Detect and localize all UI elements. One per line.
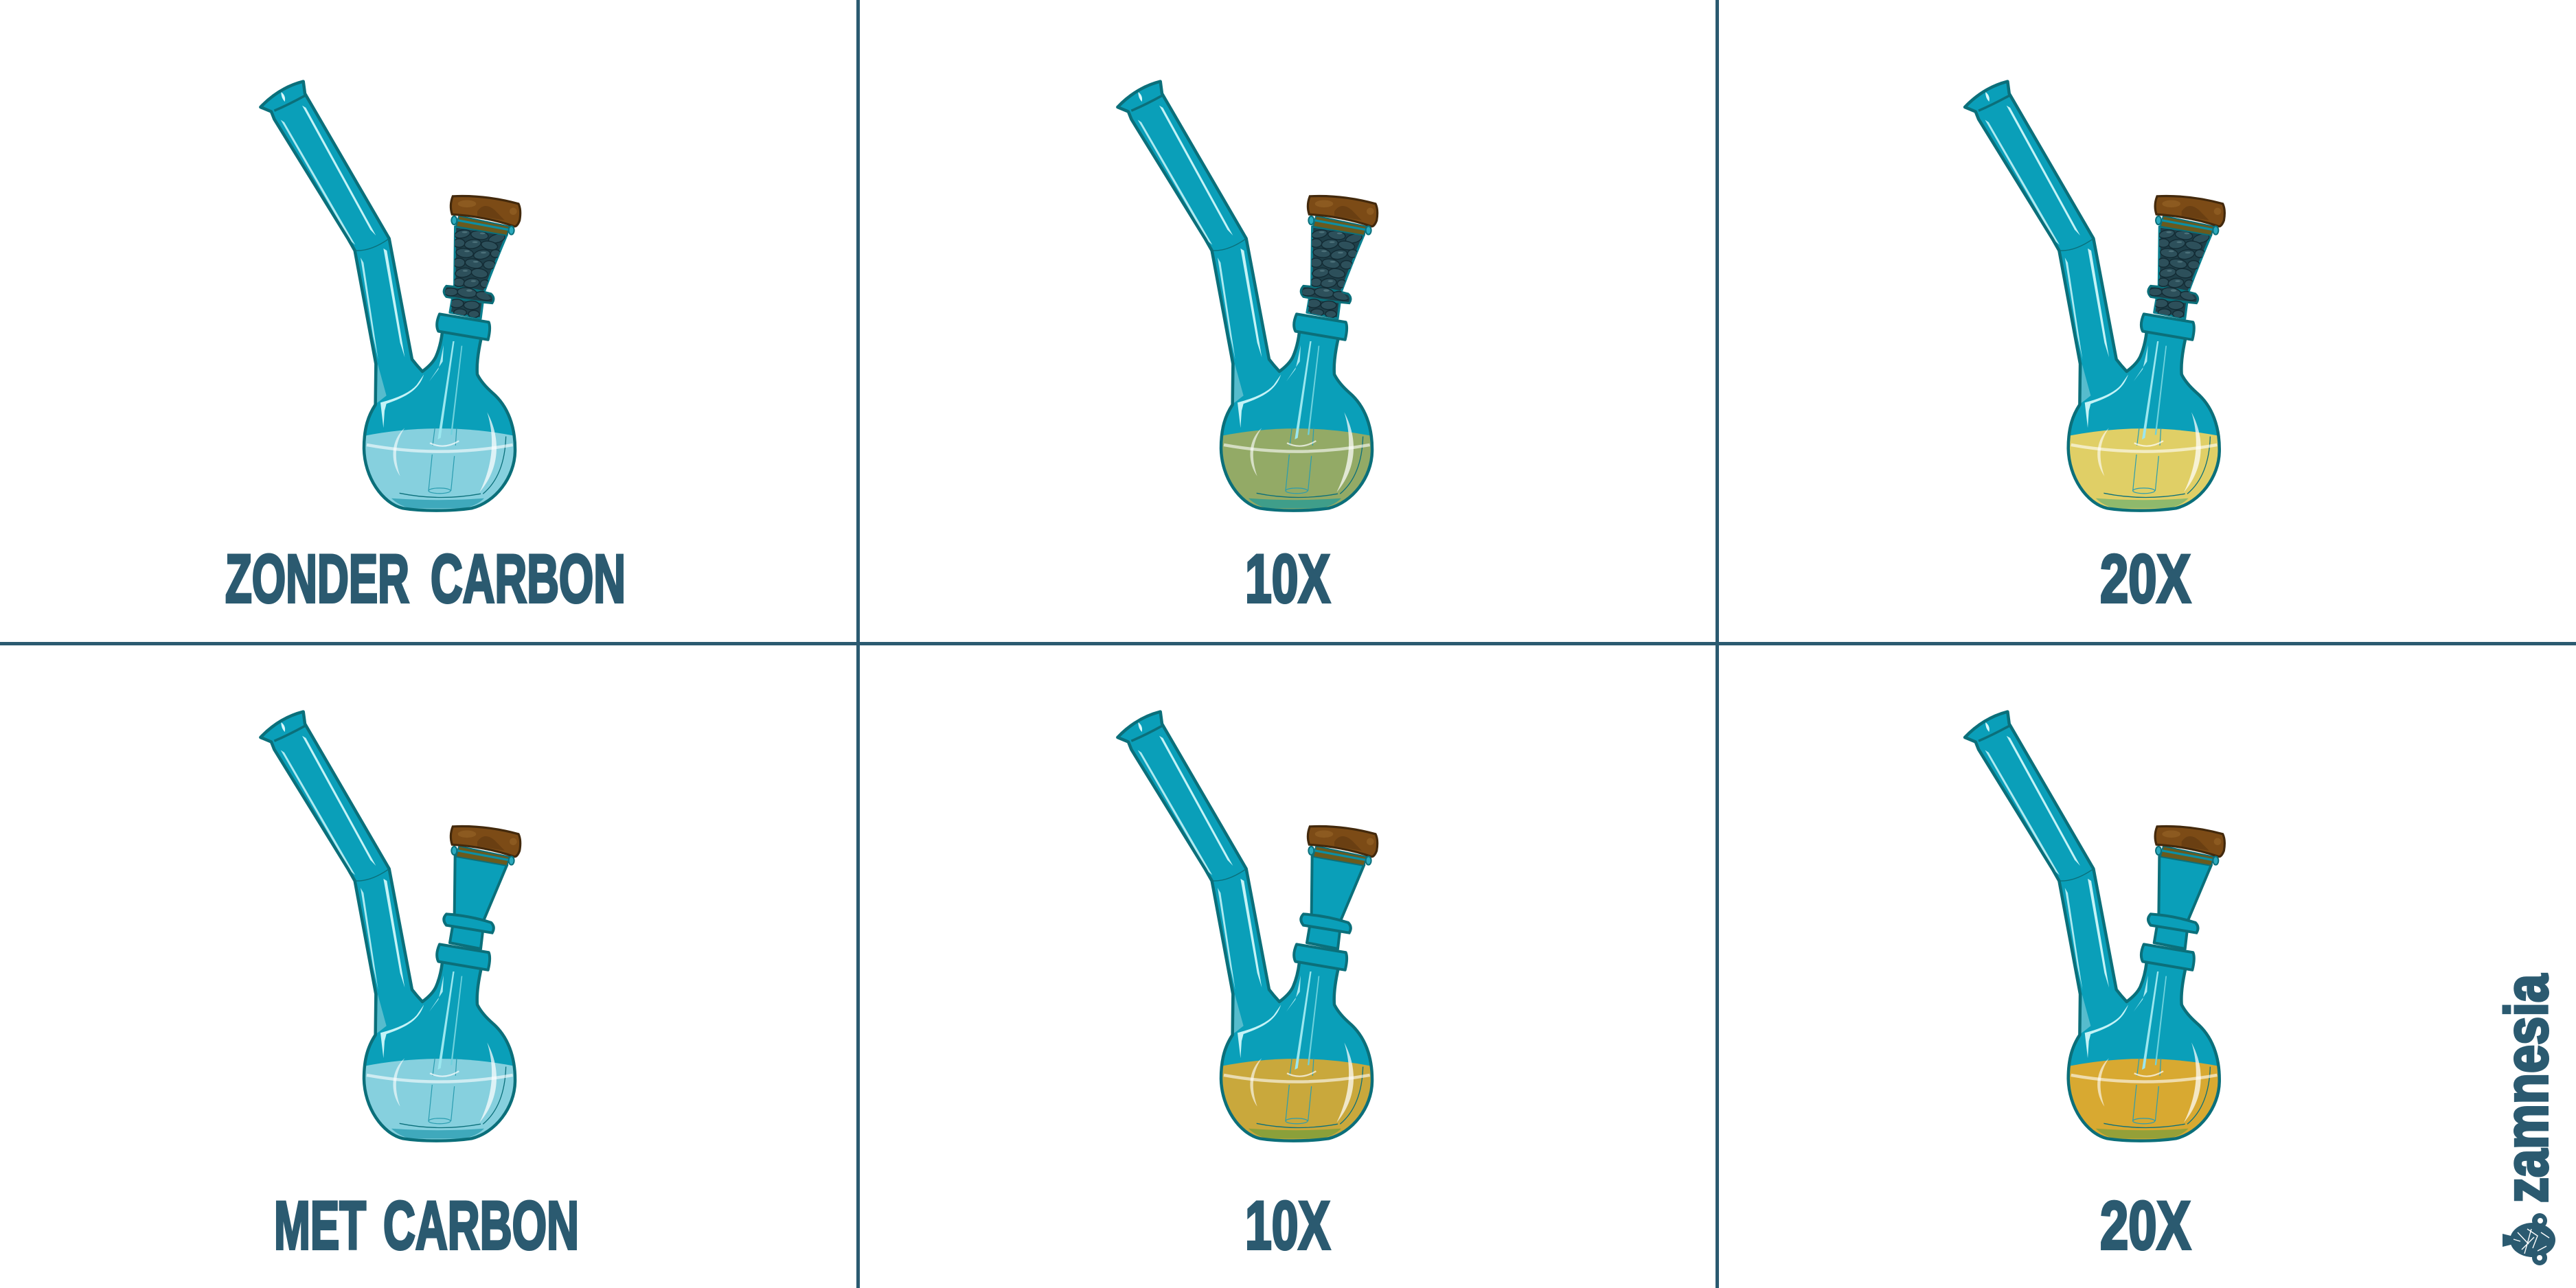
panel: 10x with carbon: [1117, 712, 1378, 1263]
icon: bong with yellow water: [1965, 82, 2224, 515]
icon: bong with plain bowl and clear water: [260, 712, 521, 1145]
label: met carbon: [274, 1187, 579, 1263]
panel: 20x with carbon: [1965, 712, 2224, 1263]
logo icon: skull: [2503, 1213, 2555, 1265]
icon: bong with orange water: [1965, 712, 2224, 1145]
label: zonder carbon: ZONDER: [225, 540, 409, 617]
label: 10x: 10X: [1245, 1187, 1330, 1263]
label: 20x: 20X: [2100, 540, 2191, 617]
label: 20x: 20X: [2100, 1187, 2191, 1263]
icon: bong with amber water: [1117, 712, 1378, 1145]
label: 10x: 10X: [1245, 540, 1330, 617]
panel: 20x without carbon: [1965, 82, 2224, 617]
panel: met carbon, clear water: [260, 712, 579, 1263]
panel: zonder carbon, clear water: [225, 82, 626, 617]
logo: zamnesia: [2494, 974, 2560, 1265]
label: met carbon: CARBON: [383, 1187, 579, 1263]
icon: bong with green water: [1117, 82, 1378, 515]
icon: bong with activated carbon bowl and clear water: [260, 82, 521, 515]
panel: 10x without carbon: [1117, 82, 1378, 617]
label: met carbon: MET: [274, 1187, 366, 1263]
label: zonder carbon: CARBON: [431, 540, 626, 617]
logo wordmark: zamnesia: [2494, 974, 2560, 1203]
